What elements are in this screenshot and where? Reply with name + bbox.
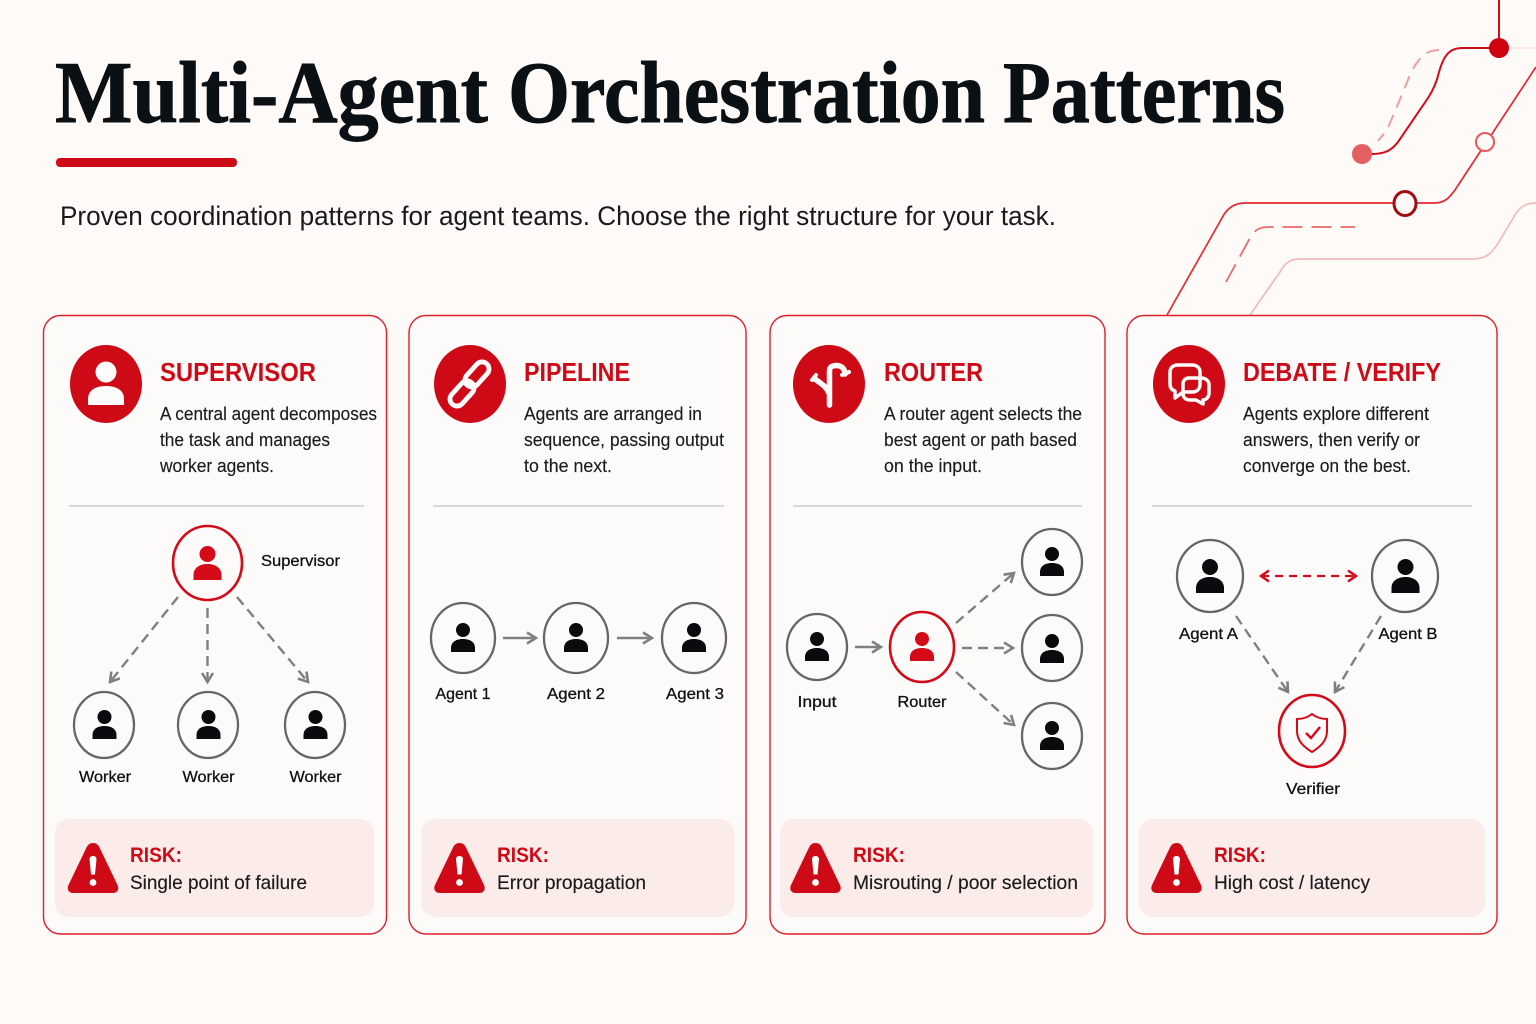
- risk callout: Single point of failure: [130, 872, 307, 894]
- title: Multi-Agent: [55, 45, 488, 142]
- description: Agents explore different: [1243, 404, 1429, 424]
- diagram: sequential agents: Agent 3: [666, 686, 724, 703]
- description: converge on the best.: [1243, 456, 1411, 476]
- description: [884, 404, 1082, 476]
- icon: branching path: [793, 345, 865, 423]
- icon: chat bubbles: [1153, 345, 1225, 423]
- risk callout: High cost / latency: [1214, 872, 1370, 894]
- diagram: sequential agents: [431, 603, 726, 703]
- diagram: sequential agents: Agent 1: [436, 686, 491, 703]
- risk callout: [421, 819, 734, 917]
- title accent bar: [56, 158, 237, 167]
- description: Agents are arranged in: [524, 404, 702, 424]
- description: [1243, 404, 1429, 476]
- description: best agent or path based: [884, 430, 1077, 450]
- diagram: debate and verifier: Agent B: [1378, 626, 1438, 643]
- heading: DEBATE / VERIFY: [1243, 357, 1441, 387]
- panel: debate / verify: [1127, 316, 1497, 934]
- risk callout: [780, 819, 1093, 917]
- heading: PIPELINE: [524, 357, 630, 387]
- description: [524, 404, 724, 476]
- heading: ROUTER: [884, 357, 983, 387]
- diagram: supervisor hierarchy: Supervisor: [261, 553, 341, 570]
- panel: supervisor: [44, 316, 386, 934]
- risk callout: [55, 819, 374, 917]
- panel: pipeline: [409, 316, 746, 934]
- description: on the input.: [884, 456, 982, 476]
- heading: SUPERVISOR: [160, 357, 316, 387]
- decorative circuit lines: [1167, 0, 1536, 315]
- description: to the next.: [524, 456, 612, 476]
- icon: person: [70, 345, 142, 423]
- diagram: supervisor hierarchy: Worker: [79, 769, 132, 786]
- title: Patterns: [1003, 45, 1285, 142]
- diagram: sequential agents: Agent 2: [547, 686, 605, 703]
- risk callout: Error propagation: [497, 872, 646, 894]
- risk callout: Misrouting / poor selection: [853, 872, 1078, 894]
- description: A router agent selects the: [884, 404, 1082, 424]
- diagram: routing: Router: [898, 694, 947, 711]
- diagram: supervisor hierarchy: [74, 526, 345, 786]
- description: worker agents.: [159, 456, 274, 476]
- icon: chain link: [434, 345, 506, 423]
- description: answers, then verify or: [1243, 430, 1420, 450]
- description: the task and manages: [160, 430, 330, 450]
- diagram: debate and verifier: Verifier: [1286, 781, 1341, 798]
- title: [55, 45, 1285, 142]
- risk callout: RISK:: [130, 844, 182, 867]
- diagram: debate and verifier: Agent A: [1179, 626, 1238, 643]
- diagram: routing: [787, 529, 1082, 769]
- diagram: supervisor hierarchy: Worker: [182, 769, 235, 786]
- diagram: routing: Input: [798, 694, 837, 711]
- risk callout: RISK:: [497, 844, 549, 867]
- description: A central agent decomposes: [160, 404, 377, 424]
- description: sequence, passing output: [524, 430, 724, 450]
- risk callout: [1139, 819, 1485, 917]
- title: Orchestration: [508, 45, 985, 142]
- risk callout: RISK:: [1214, 844, 1266, 867]
- diagram: debate and verifier: [1177, 540, 1438, 798]
- risk callout: RISK:: [853, 844, 905, 867]
- subtitle: Proven coordination patterns for agent teams. Choose the right structure for your task.: [60, 201, 1056, 231]
- diagram: supervisor hierarchy: Worker: [290, 769, 342, 786]
- description: [159, 404, 377, 476]
- panel: router: [770, 316, 1105, 934]
